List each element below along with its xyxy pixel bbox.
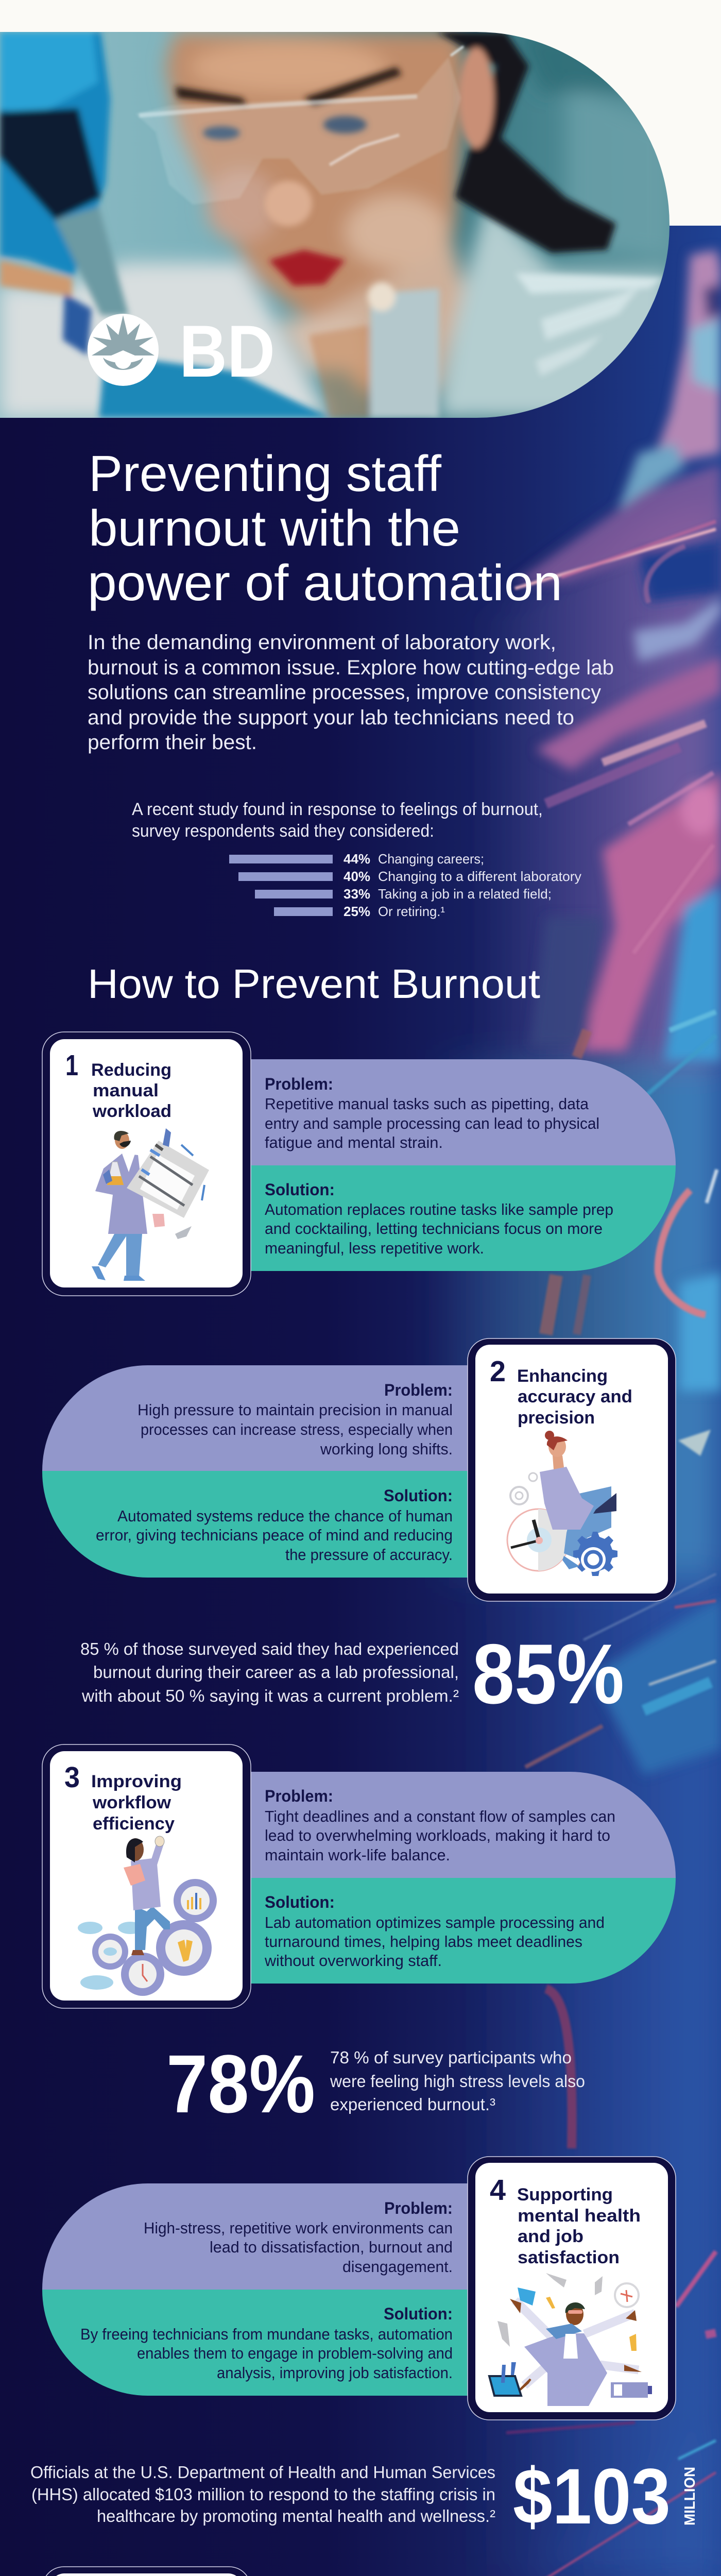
- logo: BD white on photo: BD: [179, 311, 275, 393]
- panel: 2 problem and solution: working long shifts.: [320, 1440, 453, 1458]
- card 2: enhancing accuracy and precision: Enhancing: [517, 1366, 608, 1386]
- stat number: $103 million: $103: [513, 2452, 671, 2540]
- stat text: 78 percent: were feeling high stress levels also: [330, 2072, 585, 2091]
- bar chart: burnout responses: 40%: [344, 869, 370, 884]
- panel: 2 problem and solution: Solution:: [384, 1486, 453, 1505]
- card 4: supporting mental health and job satisfaction: satisfaction: [518, 2248, 620, 2267]
- bar chart: burnout responses: [229, 851, 581, 919]
- card 2: enhancing accuracy and precision: accuracy and: [518, 1387, 632, 1406]
- logo: BD white on photo: [88, 311, 275, 393]
- panel: 3 problem and solution: Lab automation optimizes sample processing and: [265, 1913, 605, 1931]
- panel: 1 problem and solution: entry and sample processing can lead to physical: [265, 1114, 599, 1132]
- card 2: enhancing accuracy and precision: 2: [490, 1355, 506, 1388]
- card 3: improving workflow efficiency: Improving: [91, 1772, 182, 1791]
- card 4: supporting mental health and job satisfaction: [468, 2157, 676, 2420]
- stat text: 78 percent: experienced burnout.³: [330, 2095, 495, 2114]
- panel: 4 problem and solution: [42, 2183, 468, 2396]
- panel: 1 problem and solution: Automation replaces routine tasks like sample prep: [265, 1200, 613, 1218]
- panel: 4 problem and solution: By freeing technicians from mundane tasks, automation: [80, 2325, 453, 2343]
- panel: 3 problem and solution: lead to overwhelming workloads, making it hard to: [265, 1826, 610, 1844]
- card 4: supporting mental health and job satisfaction: 4: [490, 2174, 506, 2207]
- panel: 2 problem and solution: processes can increase stress, especially when: [141, 1420, 453, 1438]
- survey intro text: A recent study found in response to feelings of burnout,: [132, 800, 543, 819]
- panel: 2 problem and solution: High pressure to maintain precision in manual: [138, 1401, 453, 1419]
- panel: 3 problem and solution: Solution:: [265, 1893, 335, 1911]
- panel: 1 problem and solution: Problem:: [265, 1075, 333, 1093]
- background: painted swirls soft layer: [515, 250, 721, 2576]
- stat text: HHS funding: Officials at the U.S. Department of Health and Human Services: [30, 2463, 495, 2482]
- intro paragraph: [88, 631, 614, 754]
- panel: 3 problem and solution: turnaround times, helping labs meet deadlines: [265, 1933, 582, 1951]
- panel: 3 problem and solution: [251, 1772, 676, 1984]
- bar chart: burnout responses: Changing careers;: [378, 851, 484, 867]
- card 4: supporting mental health and job satisfaction: Supporting: [517, 2185, 613, 2205]
- intro paragraph: burnout is a common issue. Explore how cutting-edge lab: [88, 656, 614, 679]
- panel: 4 problem and solution: enables them to engage in problem-solving and: [137, 2344, 453, 2362]
- stat text: 78 percent: 78 % of survey participants who: [330, 2048, 572, 2067]
- card 1: reducing manual workload: 1: [65, 1049, 78, 1082]
- survey intro text: survey respondents said they considered:: [132, 821, 434, 841]
- stat text: HHS funding: healthcare by promoting mental health and wellness.²: [97, 2506, 495, 2526]
- illustration: technician with laptop, clock and gear: [507, 1431, 617, 1576]
- stat number: 78%: 78%: [166, 2038, 315, 2130]
- title: preventing staff burnout: burnout with the: [89, 500, 460, 556]
- bar chart: burnout responses: Changing to a different laboratory: [378, 869, 581, 884]
- intro paragraph: solutions can streamline processes, improve consistency: [88, 681, 601, 704]
- stat text: HHS funding: (HHS) allocated $103 million to respond to the staffing crisis in: [31, 2485, 495, 2504]
- title: preventing staff burnout: Preventing staff: [89, 445, 442, 502]
- stat text: 85 percent: burnout during their career as a lab professional,: [93, 1663, 459, 1682]
- panel: 4 problem and solution: Solution:: [384, 2304, 453, 2323]
- stat text: HHS funding: [30, 2463, 495, 2526]
- card 1: reducing manual workload: [42, 1032, 251, 1296]
- intro paragraph: perform their best.: [88, 731, 257, 754]
- panel: 2 problem and solution: [42, 1365, 468, 1578]
- bar chart: burnout responses: 25%: [344, 904, 370, 919]
- background: painted wash layer: [427, 500, 721, 2576]
- card 1: reducing manual workload: workload: [92, 1101, 171, 1121]
- title: preventing staff burnout: power of automation: [88, 554, 562, 611]
- illustration: scientist holding form: [92, 1128, 209, 1281]
- stat text: 85 percent: with about 50 % saying it was a current problem.²: [81, 1686, 459, 1705]
- panel: 3 problem and solution: maintain work-life balance.: [265, 1846, 450, 1864]
- panel: 1 problem and solution: and cocktailing, letting technicians focus on more: [265, 1219, 603, 1238]
- panel: 1 problem and solution: Repetitive manual tasks such as pipetting, data: [265, 1095, 589, 1113]
- panel: 2 problem and solution: Problem:: [384, 1381, 453, 1399]
- background: painted swirls sharper streaks: [443, 521, 717, 2576]
- panel: 4 problem and solution: lead to dissatisfaction, burnout and: [210, 2238, 453, 2256]
- panel: 1 problem and solution: [251, 1059, 676, 1271]
- panel: 3 problem and solution: without overworking staff.: [264, 1952, 442, 1970]
- panel: 1 problem and solution: fatigue and mental strain.: [265, 1133, 443, 1151]
- card 3: improving workflow efficiency: [42, 1744, 251, 2008]
- card 1: reducing manual workload: Reducing: [91, 1060, 171, 1080]
- illustration: multitasking scientist with many arms: [489, 2273, 652, 2406]
- bar chart: burnout responses: 33%: [344, 886, 370, 902]
- stat number: 85%: 85%: [472, 1626, 624, 1721]
- intro paragraph: In the demanding environment of laboratory work,: [88, 631, 556, 654]
- illustration: scientist climbing gears: [78, 1836, 217, 1996]
- stat text: 78 percent: [330, 2048, 585, 2114]
- bar chart: burnout responses: 44%: [344, 851, 370, 867]
- heading: how to prevent burnout: How to Prevent Burnout: [88, 961, 540, 1007]
- panel: 1 problem and solution: Solution:: [265, 1180, 335, 1199]
- panel: 1 problem and solution: meaningful, less repetitive work.: [265, 1239, 484, 1257]
- title: preventing staff burnout: [88, 445, 562, 611]
- stat text: 85 percent: [80, 1639, 459, 1705]
- panel: 3 problem and solution: Tight deadlines and a constant flow of samples can: [265, 1807, 615, 1825]
- panel: 4 problem and solution: Problem:: [384, 2199, 453, 2217]
- card 1: reducing manual workload: manual: [93, 1081, 159, 1100]
- stat number: $103 million: MILLION: [682, 2467, 698, 2526]
- card 4: supporting mental health and job satisfaction: and job: [518, 2227, 583, 2246]
- hero photo: scientist with goggles and pipette: [0, 32, 680, 418]
- bar chart: burnout responses: Taking a job in a related field;: [378, 886, 552, 902]
- intro paragraph: and provide the support your lab technicians need to: [88, 706, 574, 729]
- card 2: enhancing accuracy and precision: [468, 1338, 676, 1601]
- stat text: 85 percent: 85 % of those surveyed said they had experienced: [80, 1639, 459, 1658]
- card 4: supporting mental health and job satisfaction: mental health: [518, 2206, 641, 2226]
- panel: 3 problem and solution: Problem:: [265, 1787, 333, 1805]
- panel: 2 problem and solution: error, giving technicians peace of mind and reducing: [96, 1526, 453, 1544]
- panel: 2 problem and solution: the pressure of accuracy.: [285, 1546, 453, 1564]
- background: cream top band: [0, 0, 721, 226]
- panel: 4 problem and solution: High-stress, repetitive work environments can: [144, 2219, 453, 2237]
- bar chart: burnout responses: Or retiring.¹: [378, 904, 445, 919]
- card 3: improving workflow efficiency: workflow: [92, 1793, 171, 1812]
- panel: 4 problem and solution: analysis, improving job satisfaction.: [217, 2364, 453, 2382]
- card 3: improving workflow efficiency: 3: [64, 1761, 80, 1794]
- panel: 2 problem and solution: Automated systems reduce the chance of human: [117, 1507, 453, 1525]
- survey intro text: [132, 800, 543, 841]
- card 3: improving workflow efficiency: efficiency: [93, 1814, 175, 1834]
- card 5: reducing overtime and fatigue: [42, 2567, 251, 2576]
- panel: 4 problem and solution: disengagement.: [342, 2258, 453, 2276]
- card 2: enhancing accuracy and precision: precision: [518, 1408, 595, 1428]
